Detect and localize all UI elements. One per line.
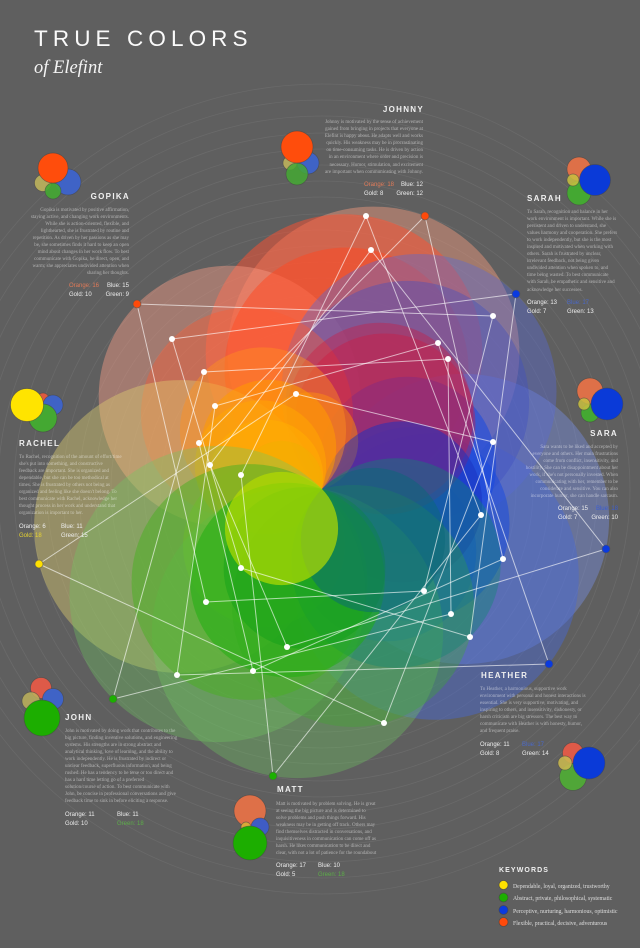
text: Sara description: come from conflict, insensitivity, and [543,459,618,464]
text: Rachel description: To Rachel, recognition of the amount of effort/time [19,454,122,460]
legend labels: Dependable, loyal, organized, trustworthy [513,884,610,890]
scores: John: Gold: 10 [65,821,88,827]
scores: Heather: Blue: 17 [522,742,544,748]
scores: Rachel: Gold: 18 [19,533,42,539]
text: John description: rushed. He has a tendency to be terse or too direct and [65,771,173,776]
text: Gopika description: warm; she appreciates undivided attention when [32,264,129,269]
mini chart: Matt [233,795,269,860]
legend labels: Abstract, private, philosophical, systematic [513,896,612,902]
text: Rachel description: times. She is frustrated by others not being as [19,483,110,488]
scores: Rachel: Orange: 6 [19,524,46,530]
text: John description: has a hard time letting go of a preferred [65,778,144,783]
text: Sara description: work, if she's not personally invested. When [529,473,618,478]
name: Sara: SARA [590,429,618,438]
scores: Johnny: Green: 12 [396,191,423,197]
text: Sarah description: persistent and driven to understand, she [527,224,606,229]
text: Matt description [276,802,376,856]
text: Rachel description: dependable, but she can be too methodical at [19,476,109,481]
text: Matt description: clear, with not a lot of patience for the roundabout [276,851,376,856]
scores: Sarah: Orange: 13 [527,300,557,306]
mini chart: Sarah [567,157,610,205]
text: Gopika description: communicate with Gopika, be direct, open, and [34,257,129,262]
text: Rachel description: feedback are important. She is organized and [19,469,109,474]
text: Sara description: considerate and sensitive. You can also [540,487,618,492]
score dots [35,212,610,780]
connecting lines per person [39,216,606,776]
text: Johnny description [325,119,423,175]
text: Gopika description [31,207,129,276]
scores: Johnny: Blue: 12 [401,182,423,188]
text: John description: unclear feedback, superfluous information, and being [65,764,172,769]
scores: Sarah: Gold: 7 [527,309,546,315]
scores: Heather: Orange: 11 [480,742,510,748]
text: Johnny description: quickly. His weakness may be in procrastinating [326,141,423,146]
text: Heather description: To Heather, a harmonious, supportive work [480,686,567,692]
scores: Sarah: Blue: 17 [567,300,589,306]
text: Rachel description [19,454,122,516]
name: Heather: HEATHER [481,671,528,680]
scores: Gopika [69,282,129,298]
scores: Sarah: Green: 13 [567,309,594,315]
text: Heather description [480,686,586,734]
scores: Heather: Green: 14 [522,751,549,757]
mini chart: Rachel [10,388,63,432]
scores: Heather [480,742,549,757]
text: Heather description: and frequent praise. [480,729,520,734]
text: Gopika description: lighthearted, she is frustrated by routine and [41,229,129,234]
legend dots [499,880,508,926]
scores: Gopika: Blue: 15 [107,283,129,289]
scores: Sara: Blue: 18 [596,506,618,512]
scores: John: Orange: 11 [65,812,95,818]
text: Rachel description: organization is important to her. [19,511,83,516]
legend labels [513,884,618,927]
scores: Matt: Green: 18 [318,872,345,878]
scores: Sarah [527,300,594,315]
mini chart: Sara [577,378,623,422]
text: Sarah description: acknowledge her successes. [527,288,583,293]
text: John description: work independently. He is frustrated by indirect or [65,757,166,762]
mini chart: Johnny [281,131,319,185]
scores: Matt: Orange: 17 [276,863,306,869]
text: John description: John, be concise in professional conversations and give [65,792,176,797]
text: Johnny description: in an environment where order and precision is [329,155,423,160]
scores: Sara: Orange: 15 [558,506,588,512]
name: Matt: MATT [277,785,304,794]
text: Sarah description: values harmony and cooperation. She prefers [527,231,617,236]
text: Johnny description: gained from bringing in projects that everyone at [325,127,423,132]
text: John description: analytical thinking, love of learning, and the ability to [65,750,173,755]
text: Sarah description: irrelevant feedback, not being given [527,259,599,264]
scores: Matt: Gold: 5 [276,872,295,878]
text: Johnny description: on time-consuming tasks. He is driven by action [326,148,423,153]
mini chart: Heather [558,742,605,790]
text: Johnny description: necessary. Humor, stimulation, and excitement [330,163,423,168]
name: John: JOHN [65,713,92,722]
text: Sara description: incorporate humor, she can handle sarcasm. [531,494,618,499]
text: Matt description: solve problems and push things forward. His [276,816,366,821]
text: Sara description: hostility. She can be disappointment about her [526,466,618,471]
title: TRUE COLORS [34,26,253,51]
scores: Matt [276,862,345,878]
text: John description [65,728,178,804]
name: Rachel: RACHEL [19,439,60,448]
text: Johnny description: Elefint is happy about. He adapts well and works [325,134,423,139]
text: Sara description: communicating with her, remember to be [535,480,618,485]
text: Matt description: inquisitiveness in communication can come off as [276,837,376,842]
text: Gopika description: repetition. As driven by her passions as she may [33,236,129,241]
text: Heather description: communicate with Heather is with honesty, humor, [480,722,582,727]
text: Gopika description: mind about changes in her work flow. To best [38,250,129,255]
text: Rachel description: she's put into something, and constructive [19,462,103,467]
scores: Gopika: Gold: 10 [69,292,92,298]
scores: John [65,812,144,827]
text: Matt description: find themselves distracted in conversations, and [276,830,372,835]
scores: Rachel: Blue: 11 [61,524,83,530]
text: John description: systems. His strengths are in strong abstract and [65,743,161,748]
mini chart: Gopika [34,153,81,199]
scores: John: Blue: 11 [117,812,139,818]
scores: Rachel [19,524,88,539]
text: Heather description: essential. She is very supportive, motivating, and [480,701,578,706]
text: Sara description [526,444,618,499]
legend labels: Perceptive, nurturing, harmonious, optimistic [513,909,617,915]
scores: Sara: Green: 10 [591,515,618,521]
text: Heather description: harsh criticism are big stressors. The best way to [480,715,577,720]
scores: Sara [558,506,618,521]
text: Sarah description: others. Sarah is frustrated by unclear, [527,252,601,257]
scores: Johnny: Orange: 18 [364,182,394,188]
scores: Rachel: Green: 15 [61,533,88,539]
text: John description: big picture, finding inventive solutions, and engineering [65,736,177,741]
text: Sarah description: work environment is important. While she is [527,217,616,222]
text: Gopika description: While she is action-oriented, flexible, and [45,222,129,227]
text: Gopika description: Gopika is motivated by positive affirmation, [40,208,129,212]
text: John description: solution/course of action. To best communicate with [65,785,170,790]
text: Matt description: harsh. He likes communication to be direct and [276,844,370,849]
text: Gopika description: be, she sometimes finds it hard to keep an open [34,243,129,248]
legend heading: KEYWORDS [499,867,549,874]
text: Sara description: Sara wants to be liked and accepted by [540,444,618,450]
scores: Gopika: Green: 9 [106,292,129,298]
scores: Matt: Blue: 10 [318,863,340,869]
text: Rachel description: thought process in her work and understand that [19,504,115,509]
name: Gopika: GOPIKA [91,192,130,201]
text: Matt description: Matt is motivated by problem solving. He is great [276,802,376,806]
scores: Heather: Gold: 8 [480,751,499,757]
overlapping score circles [34,207,609,778]
text: Johnny description: Johnny is motivated by the sense of achievement [325,120,423,125]
text: Rachel description: organized and feeling like she doesn't belong. To [19,490,117,495]
text: John description: feedback time to sink in before eliciting a response. [65,799,168,804]
text: Heather description: inspiring to others, and insensitivity, dishonesty, or [480,708,582,713]
text: Sarah description: undivided attention when spoken to, and [527,266,608,271]
text: Gopika description: sharing her thoughts. [87,271,129,276]
text: Sarah description: inspired and motivated when working with [527,245,613,250]
text: Gopika description: staying active, and changing work environments. [31,215,129,220]
subtitle: of Elefint [34,58,102,78]
scores: John: Green: 18 [117,821,144,827]
scores: Gopika: Orange: 16 [69,283,99,289]
mini chart: John [22,678,64,736]
text: Rachel description: best communicate with Rachel, acknowledge her [19,497,117,502]
scores: Johnny: Gold: 8 [364,191,383,197]
text: Heather description: environment with personal and honest interactions is [480,694,586,699]
text: Matt description: at seeing the big picture and is determined to [276,809,366,814]
scores: Johnny [364,182,423,197]
text: Sarah description: to work independently, but she is the most [527,238,611,243]
scores: Sara: Gold: 7 [558,515,577,521]
name: Sarah: SARAH [527,194,562,203]
text: Sara description: everyone and others. Her main frustrations [532,452,618,457]
text: Sarah description: with Sarah, be empathetic and sensitive and [527,280,615,285]
legend labels: Flexible, practical, decisive, adventurous [513,921,607,927]
text: Sarah description: time being wasted. To best communicate [527,273,608,278]
text: John description: John is motivated by doing work that contributes to the [65,728,175,734]
text: Johnny description: are important when communicating with Johnny. [325,170,423,175]
text: Sarah description: To Sarah, recognition and balance in her [527,210,608,214]
name: Johnny: JOHNNY [383,105,424,114]
text: Matt description: weakness may be in getting off track. Others may [276,823,375,828]
text: Sarah description [527,210,617,293]
